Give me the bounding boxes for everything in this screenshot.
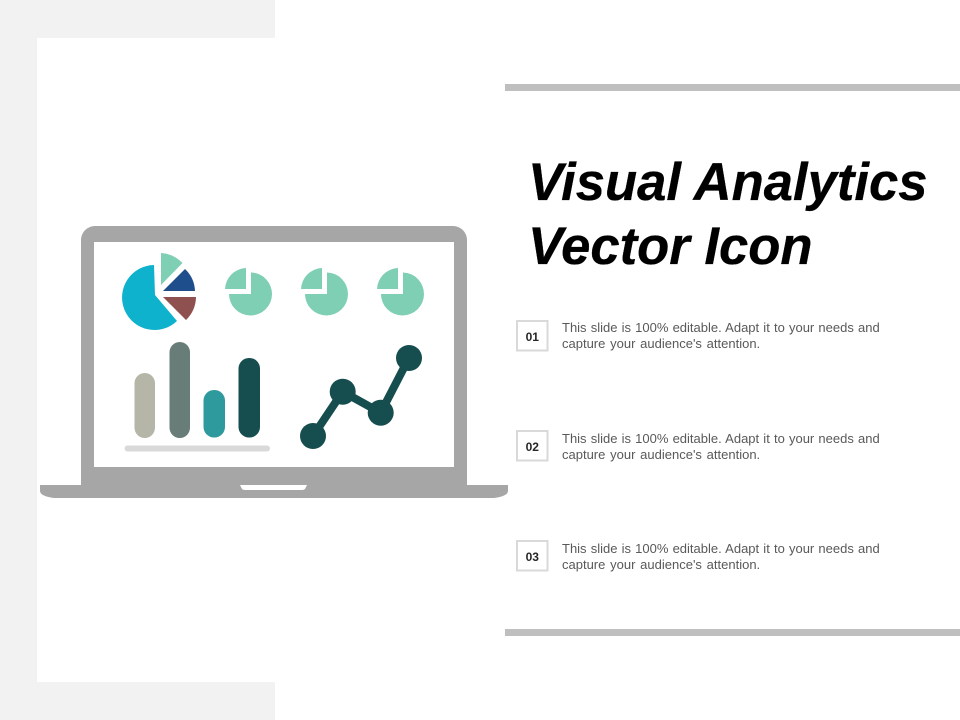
text block 03: This slide is 100% editable. Adapt it to your needs and <box>562 541 880 556</box>
text block 03 <box>562 541 880 572</box>
laptop screen <box>94 242 454 467</box>
chart: main pie <box>122 253 196 330</box>
number box 02 <box>517 431 548 460</box>
laptop body <box>81 226 467 486</box>
text block 02: This slide is 100% editable. Adapt it to your needs and <box>562 431 880 446</box>
number box 03: 03 <box>526 550 539 564</box>
chart: small pie 3 <box>377 268 424 315</box>
text block 03: capture your audience's attention. <box>562 557 760 572</box>
number box 01: 01 <box>526 330 539 344</box>
chart: bar chart <box>124 342 270 452</box>
bottom rule <box>505 629 960 636</box>
text block 02: capture your audience's attention. <box>562 447 760 462</box>
panel: left background <box>0 0 275 720</box>
chart: small pie 1 <box>225 268 272 315</box>
laptop base <box>40 485 508 498</box>
text block 01: capture your audience's attention. <box>562 336 760 351</box>
title: Vector Icon <box>528 217 812 276</box>
item 01 <box>517 320 880 351</box>
laptop notch <box>240 485 307 490</box>
number box 01 <box>517 321 548 350</box>
top rule <box>505 84 960 91</box>
chart: line chart <box>300 345 422 449</box>
text block 02 <box>562 431 880 462</box>
text block 01 <box>562 320 880 351</box>
item 03 <box>517 541 880 572</box>
icon: laptop <box>40 226 508 498</box>
number box 02: 02 <box>526 440 539 454</box>
text block 01: This slide is 100% editable. Adapt it to your needs and <box>562 320 880 335</box>
chart: small pie 2 <box>301 268 348 315</box>
number box 03 <box>517 541 548 570</box>
title: Visual Analytics <box>528 153 928 212</box>
item 02 <box>517 431 880 462</box>
title <box>528 153 928 276</box>
